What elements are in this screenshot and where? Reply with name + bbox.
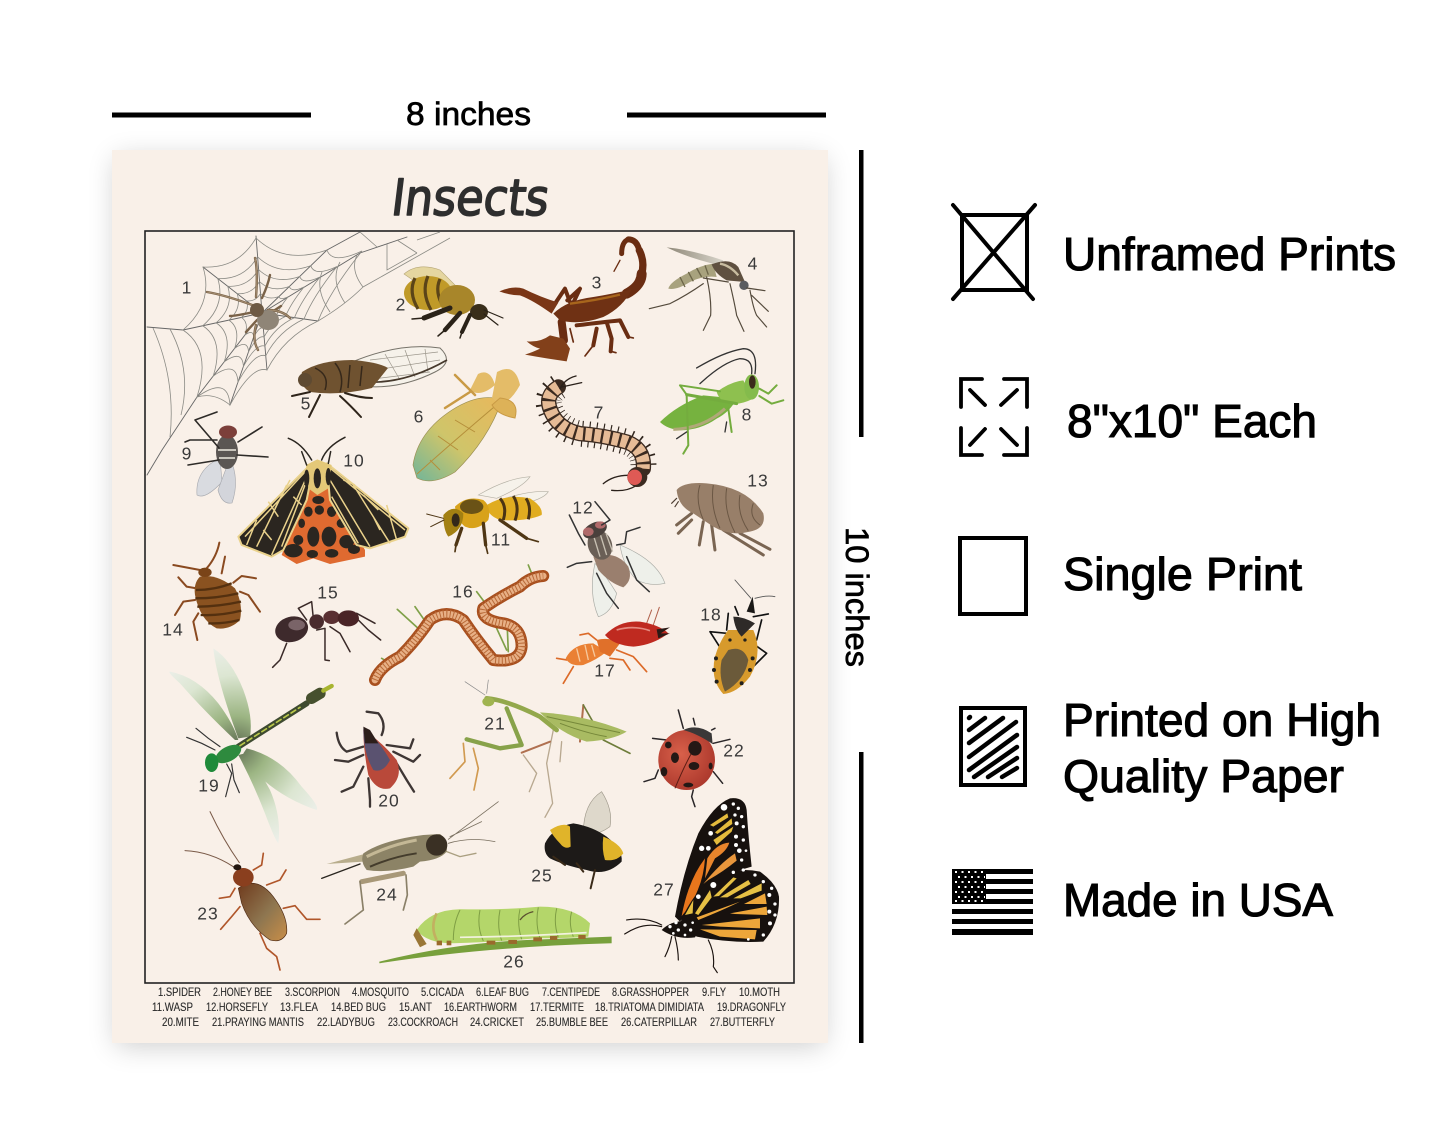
insect 27: butterfly <box>625 798 779 973</box>
insect 23: cockroach <box>185 812 320 970</box>
insect 9: fly <box>182 412 268 503</box>
insect 15: ant: 15 <box>317 583 339 603</box>
legend: insect names: 15.ANT <box>399 1000 433 1014</box>
legend: insect names: 27.BUTTERFLY <box>710 1015 775 1029</box>
feature: made in USA: Made in USA <box>1063 874 1333 926</box>
insect 1: spider on web: 1 <box>182 278 192 298</box>
legend: insect names: 6.LEAF BUG <box>476 985 529 999</box>
feature: high quality paper: Printed on High <box>1063 694 1381 746</box>
insect 15: ant <box>272 583 381 667</box>
insect 17: termite <box>557 607 670 683</box>
insect 19: dragonfly <box>169 648 332 843</box>
legend: insect names: 1.SPIDER <box>158 985 201 999</box>
insect 4: mosquito: 4 <box>748 254 758 274</box>
icon: empty square <box>960 538 1026 614</box>
insect 10: moth <box>238 437 408 564</box>
insect 18: triatoma dimidiata: 18 <box>700 605 722 625</box>
insect 20: mite <box>335 712 420 811</box>
legend: insect names: 22.LADYBUG <box>317 1015 375 1029</box>
legend: insect names: 5.CICADA <box>421 985 464 999</box>
feature: unframed prints <box>953 205 1396 299</box>
insect 25: bumble bee: 25 <box>531 866 553 886</box>
legend: insect names: 13.FLEA <box>280 1000 318 1014</box>
insect 16: earthworm <box>375 565 543 680</box>
legend: insect names: 9.FLY <box>702 985 726 999</box>
insect 6: leaf bug: 6 <box>414 407 424 427</box>
insect 21: praying mantis <box>450 680 630 817</box>
icon: expand arrows <box>961 379 1027 455</box>
legend: insect names <box>152 985 786 1029</box>
feature: high quality paper <box>961 694 1381 802</box>
insect 20: mite: 20 <box>378 791 400 811</box>
legend: insect names: 21.PRAYING MANTIS <box>212 1015 304 1029</box>
feature: size 8x10 each <box>961 379 1317 455</box>
title: Insects <box>389 168 553 227</box>
insect 4: mosquito <box>649 247 768 331</box>
legend: insect names: 23.COCKROACH <box>388 1015 458 1029</box>
dimension: 10 inches height <box>839 150 875 1043</box>
insect 7: centipede <box>549 376 647 491</box>
feature: size 8x10 each: 8"x10" Each <box>1067 395 1317 447</box>
insect 5: cicada <box>292 347 447 417</box>
insect 24: cricket <box>322 802 498 924</box>
legend: insect names: 7.CENTIPEDE <box>542 985 600 999</box>
icon: crossed-out frame <box>953 205 1035 299</box>
insect 14: bed bug <box>162 543 260 640</box>
legend: insect names: 25.BUMBLE BEE <box>536 1015 608 1029</box>
insect 12: horsefly: 12 <box>572 498 594 518</box>
chart frame <box>145 231 794 983</box>
insect 3: scorpion: 3 <box>592 273 602 293</box>
insect 17: termite: 17 <box>594 661 616 681</box>
insect 14: bed bug: 14 <box>162 620 184 640</box>
legend: insect names: 8.GRASSHOPPER <box>612 985 689 999</box>
insect 8: grasshopper: 8 <box>742 405 752 425</box>
insect 6: leaf bug <box>413 369 520 481</box>
legend: insect names: 17.TERMITE <box>530 1000 584 1014</box>
insect 5: cicada: 5 <box>301 394 311 414</box>
icon: hatched paper <box>961 708 1025 785</box>
insect 25: bumble bee <box>531 792 623 888</box>
insect 1: spider on web <box>147 232 450 475</box>
feature: unframed prints: Unframed Prints <box>1063 228 1396 280</box>
paper shadow <box>116 158 824 1046</box>
insect 27: butterfly: 27 <box>653 880 675 900</box>
insect 24: cricket: 24 <box>376 885 398 905</box>
insect 26: caterpillar: 26 <box>503 952 525 972</box>
legend: insect names: 18.TRIATOMA DIMIDIATA <box>595 1000 704 1014</box>
dimension: 8 inches width <box>112 96 826 132</box>
insect 12: horsefly <box>567 498 665 617</box>
legend: insect names: 20.MITE <box>162 1015 199 1029</box>
icon: American flag <box>952 869 1033 935</box>
insect 16: earthworm: 16 <box>452 582 474 602</box>
feature: single print: Single Print <box>1063 548 1302 600</box>
insect 23: cockroach: 23 <box>197 904 219 924</box>
dimension: 10 inches height: 10 inches <box>839 527 875 667</box>
legend: insect names: 26.CATERPILLAR <box>621 1015 697 1029</box>
insect 2: honey bee <box>396 267 503 338</box>
insect 3: scorpion <box>499 239 643 361</box>
insect 10: moth: 10 <box>343 451 365 471</box>
panel: insects poster <box>112 150 828 1043</box>
insect 13: flea: 13 <box>747 471 769 491</box>
insect 7: centipede: 7 <box>594 403 604 423</box>
insect 21: praying mantis: 21 <box>484 714 506 734</box>
legend: insect names: 19.DRAGONFLY <box>717 1000 786 1014</box>
insect 11: wasp <box>427 477 548 553</box>
legend: insect names: 4.MOSQUITO <box>352 985 409 999</box>
insect 8: grasshopper <box>660 349 783 454</box>
insect 19: dragonfly: 19 <box>198 776 220 796</box>
legend: insect names: 3.SCORPION <box>285 985 340 999</box>
feature: made in USA <box>952 869 1333 935</box>
dimension: 8 inches width: 8 inches <box>406 96 531 132</box>
legend: insect names: 2.HONEY BEE <box>213 985 272 999</box>
legend: insect names: 16.EARTHWORM <box>444 1000 517 1014</box>
insect 22: ladybug: 22 <box>723 741 745 761</box>
legend: insect names: 11.WASP <box>152 1000 193 1014</box>
feature: single print <box>960 538 1302 614</box>
insect 9: fly: 9 <box>182 444 192 464</box>
insect 18: triatoma dimidiata <box>700 580 775 694</box>
insect 26: caterpillar <box>379 907 612 972</box>
legend: insect names: 12.HORSEFLY <box>206 1000 268 1014</box>
insect 11: wasp: 11 <box>491 530 511 550</box>
insect 22: ladybug <box>644 710 745 807</box>
legend: insect names: 10.MOTH <box>739 985 780 999</box>
feature: high quality paper: Quality Paper <box>1063 750 1344 802</box>
legend: insect names: 14.BED BUG <box>331 1000 386 1014</box>
legend: insect names: 24.CRICKET <box>470 1015 525 1029</box>
insect 13: flea <box>672 471 770 555</box>
insect 2: honey bee: 2 <box>396 295 406 315</box>
